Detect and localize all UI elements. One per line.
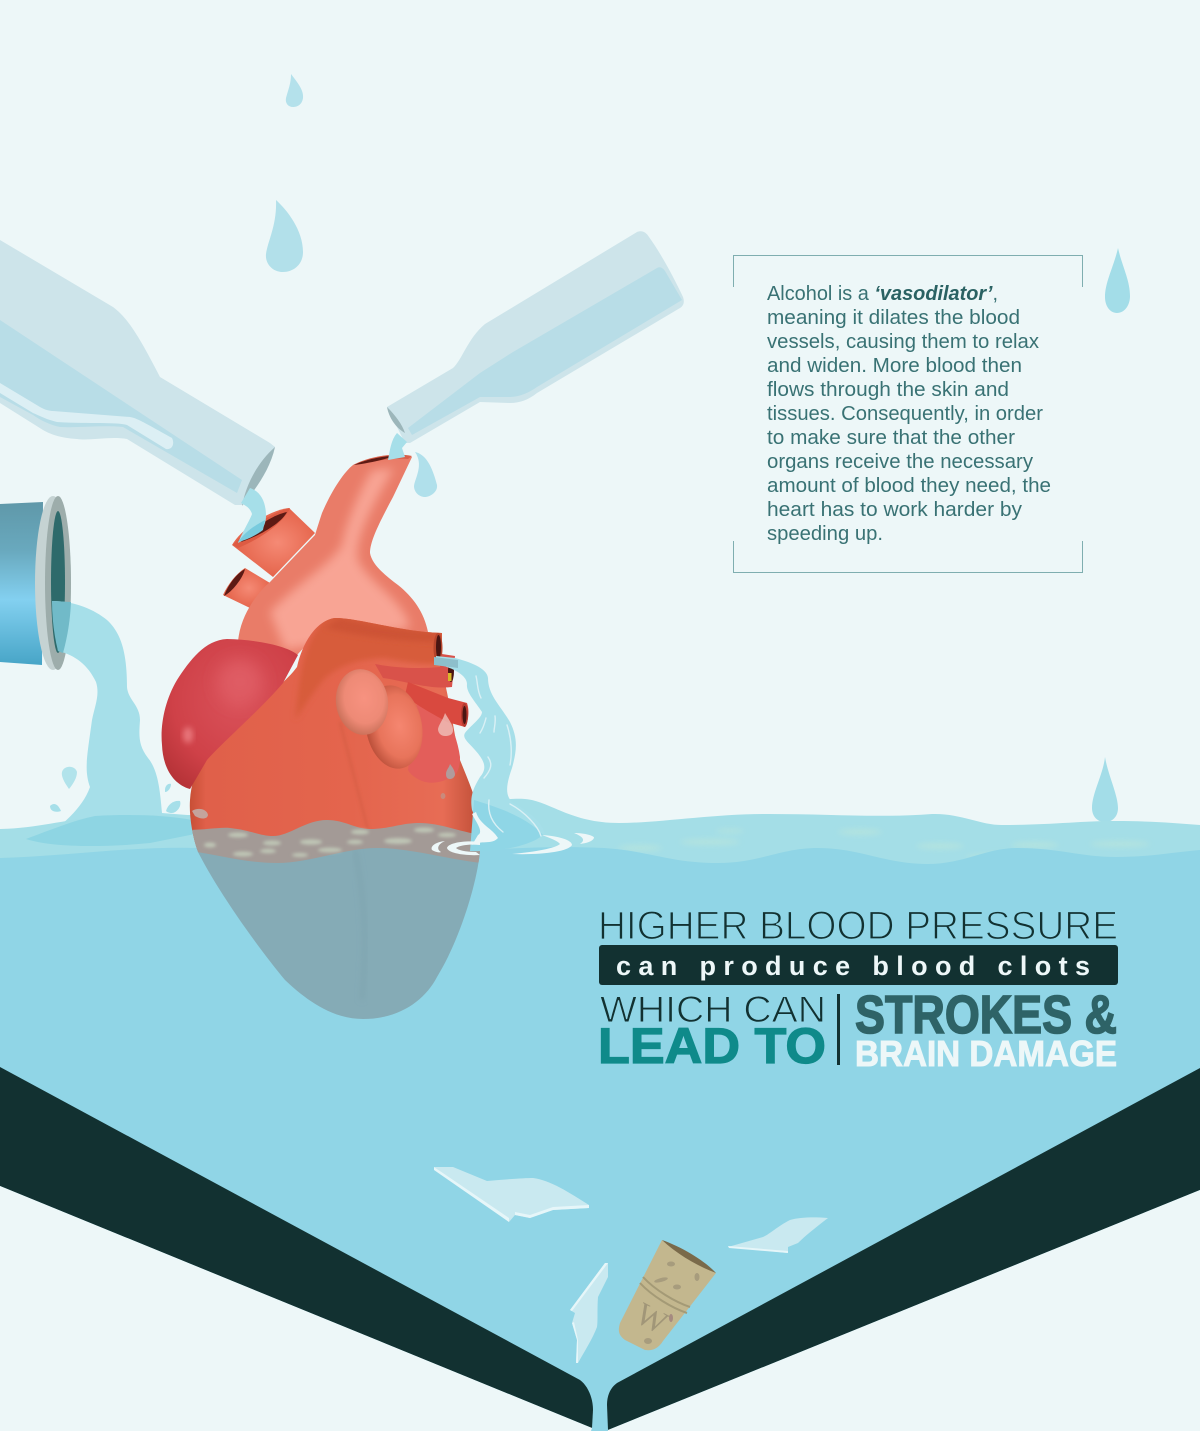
upper bump bbox=[332, 666, 392, 738]
page corner: right bbox=[608, 1190, 1200, 1431]
vessel: middle right bbox=[375, 654, 455, 688]
icon: drop above water bbox=[1092, 757, 1118, 822]
text block: vasodilator explanation: meaning it dilates the blood bbox=[767, 307, 1020, 329]
text block: vasodilator explanation: speeding up. bbox=[767, 523, 883, 545]
vessel: lower left bbox=[223, 568, 270, 608]
shadow pool: left bbox=[26, 815, 205, 846]
water ripples bbox=[432, 833, 594, 855]
dark book edge: right bbox=[607, 1068, 1200, 1430]
heading line: strokes: STROKES & bbox=[855, 985, 1117, 1045]
wine cork: W bbox=[630, 1295, 674, 1341]
pink chamber bbox=[408, 703, 460, 783]
wine cork bbox=[619, 1240, 716, 1350]
banner: can produce blood clots: can produce blood clots bbox=[616, 951, 1090, 981]
vessel: upper left bbox=[232, 508, 315, 577]
icon: small falling drop bbox=[286, 74, 303, 107]
text block: vasodilator explanation: Alcohol is a ‘vasodilator’, bbox=[767, 283, 998, 305]
text block: vasodilator explanation: flows through the skin and bbox=[767, 379, 1009, 401]
heading line: lead to: LEAD TO bbox=[598, 1018, 826, 1074]
seam bbox=[340, 722, 368, 830]
divider bbox=[837, 994, 840, 1065]
heading: stacked message bbox=[598, 904, 1118, 1074]
water stream from pipe bbox=[50, 601, 200, 835]
icon: drop beside text bbox=[1105, 248, 1130, 313]
text block: vasodilator explanation: to make sure that the other bbox=[767, 427, 1015, 449]
waterline band bbox=[188, 820, 482, 863]
page corner: left bbox=[0, 1186, 592, 1431]
text block: vasodilator explanation: tissues. Consequently, in order bbox=[767, 403, 1043, 425]
icon: drip at aorta bbox=[414, 452, 437, 497]
heading line: brain damage: BRAIN DAMAGE bbox=[855, 1033, 1117, 1074]
vessel: lower right bbox=[405, 682, 468, 727]
icon: large falling drop bbox=[266, 200, 303, 272]
text block: vasodilator explanation: organs receive the necessary bbox=[767, 451, 1033, 473]
water main body bbox=[0, 847, 1200, 1431]
icon: splash drops left bbox=[50, 767, 180, 813]
text block: vasodilator explanation: and widen. More blood then bbox=[767, 355, 1022, 377]
pipe bbox=[0, 496, 71, 670]
red atrium bbox=[162, 639, 298, 789]
glass shard: lower bbox=[570, 1263, 608, 1363]
lower bump bbox=[359, 681, 429, 773]
aorta opening bbox=[353, 455, 412, 465]
pour from left bottle bbox=[238, 488, 266, 543]
heading line: higher blood pressure: HIGHER BLOOD PRESSURE bbox=[598, 904, 1118, 948]
callout frame bbox=[734, 256, 1082, 572]
glass shard: right bbox=[728, 1217, 828, 1253]
pour from right bottle bbox=[388, 433, 407, 460]
band highlights bbox=[204, 828, 456, 857]
dark book edge: left bbox=[0, 1067, 593, 1428]
heart body bbox=[185, 610, 485, 850]
banner: can produce blood clots bbox=[599, 945, 1118, 985]
text block: vasodilator explanation: vessels, causing them to relax bbox=[767, 331, 1039, 353]
text block: vasodilator explanation bbox=[767, 283, 1051, 545]
aorta bbox=[238, 455, 428, 654]
sheen: right surface bbox=[618, 829, 1150, 860]
text block: vasodilator explanation: amount of blood they need, the bbox=[767, 475, 1051, 497]
water surface bbox=[0, 799, 1200, 880]
text block: vasodilator explanation: heart has to work harder by bbox=[767, 499, 1022, 521]
heading line: which can: WHICH CAN bbox=[600, 989, 826, 1030]
glass shard: large bbox=[434, 1167, 589, 1222]
right wine bottle bbox=[387, 231, 684, 443]
heart bbox=[155, 450, 485, 1025]
left wine bottle bbox=[0, 240, 275, 506]
droplets on heart bbox=[192, 713, 455, 818]
water stream from heart vessel bbox=[434, 656, 545, 851]
pulmonary artery bbox=[296, 618, 442, 713]
heart: submerged section bbox=[185, 820, 485, 1025]
